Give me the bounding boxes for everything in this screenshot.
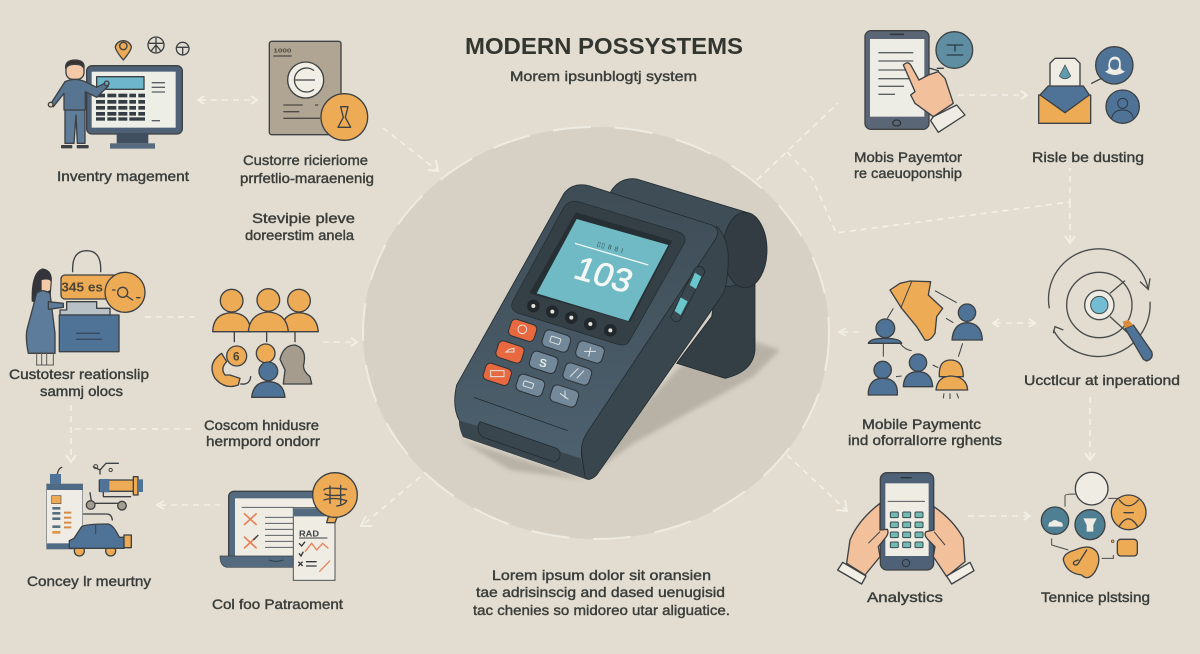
printer slot	[474, 397, 568, 462]
panel: inventory management	[48, 37, 189, 184]
label line 2: ind oforralIorre rghents	[848, 432, 1002, 448]
text block: store process	[245, 210, 355, 243]
device shadows	[460, 340, 780, 480]
icon: factory, scooter and car	[47, 463, 143, 556]
teal screen	[537, 219, 668, 321]
label line 2: re caeuoponship	[854, 165, 962, 181]
icon: hands holding phone	[838, 473, 974, 584]
icon: connected hub of circles	[1041, 472, 1146, 578]
panel: team support	[204, 289, 320, 449]
panel: email contacts	[1032, 47, 1144, 165]
text block: description: tae adrisinscig and dased uenugisid	[476, 584, 725, 600]
label: Ucctlcur at inperationd	[1024, 372, 1180, 388]
icon: euro document with coin: 1000	[273, 49, 291, 55]
label line 2: prrfetlio-maraenenig	[240, 170, 374, 186]
icon: people and phone support: 6	[233, 350, 240, 363]
device side face	[580, 226, 728, 479]
text block: description: tac chenies so midoreo utar aliguatice.	[473, 602, 730, 618]
label: Concey lr meurtny	[27, 573, 151, 589]
panel: operations target	[1024, 249, 1180, 388]
panel: network of people	[848, 281, 1002, 448]
screen bezel	[512, 201, 685, 345]
POS terminal device: 103	[569, 250, 638, 301]
text block: description: Lorem ipsum dolor sit oransien	[492, 567, 711, 583]
label: Custorre ricieriome	[243, 152, 368, 168]
POS terminal device	[455, 179, 780, 480]
label: Risle be dusting	[1032, 149, 1144, 165]
label: Mobile Paymentc	[862, 416, 981, 432]
POS terminal device: S	[538, 357, 548, 371]
icon: person at POS monitor	[48, 37, 189, 149]
title: MODERN POSSYSTEMS	[465, 33, 743, 59]
orange function keys	[482, 318, 538, 387]
icon: target with magnifier	[1048, 249, 1152, 361]
icon: euro document with coin	[269, 41, 368, 140]
label line 2: sammj olocs	[40, 383, 123, 399]
device front face	[455, 185, 718, 478]
icon: envelope with avatars	[1039, 47, 1139, 123]
label: Analystics	[867, 589, 943, 605]
panel: payment report	[212, 473, 357, 612]
panel: customer relationship	[9, 251, 149, 399]
icon: laptop, checklist and coin: RAD	[299, 529, 319, 539]
icon: people and phone support	[212, 289, 318, 397]
label: Col foo Patraoment	[212, 596, 343, 612]
panel: mobile payment	[854, 31, 973, 181]
paper roll and stand	[611, 179, 767, 378]
label: Tennice plstsing	[1041, 589, 1150, 605]
lower front band	[459, 421, 585, 478]
card reader slot	[671, 266, 705, 322]
label line 2: hermpord ondorr	[206, 433, 320, 449]
panel: technical planning	[1041, 472, 1150, 605]
dashed connector arrows	[66, 91, 1095, 526]
label: Coscom hnidusre	[204, 417, 319, 433]
soft keys	[527, 300, 617, 337]
label: Inventry magement	[57, 168, 189, 184]
grey keypad	[515, 329, 606, 408]
label: Mobis Payemtor	[854, 149, 962, 165]
icon: tablet with tapping hand	[865, 31, 973, 132]
icon: laptop, checklist and coin	[220, 473, 357, 580]
label: Custotesr reationslip	[9, 366, 149, 382]
text block: store process: doreerstim anela	[245, 227, 354, 243]
icon: woman with register and tag: 345 es	[61, 280, 103, 295]
text block: description	[473, 567, 730, 618]
icon: woman with register and tag	[26, 251, 145, 365]
panel: analytics	[838, 473, 974, 605]
panel: concierge / delivery	[27, 463, 151, 589]
panel: customer profile	[240, 41, 374, 186]
icon: connected people with orange map	[868, 281, 982, 399]
central backdrop circle	[363, 127, 829, 539]
screen reading: ▯▯ 8 8 I	[596, 241, 624, 255]
text block: store process: Stevipie pleve	[252, 210, 355, 226]
subtitle: Morem ipsunblogtj system	[510, 68, 697, 84]
